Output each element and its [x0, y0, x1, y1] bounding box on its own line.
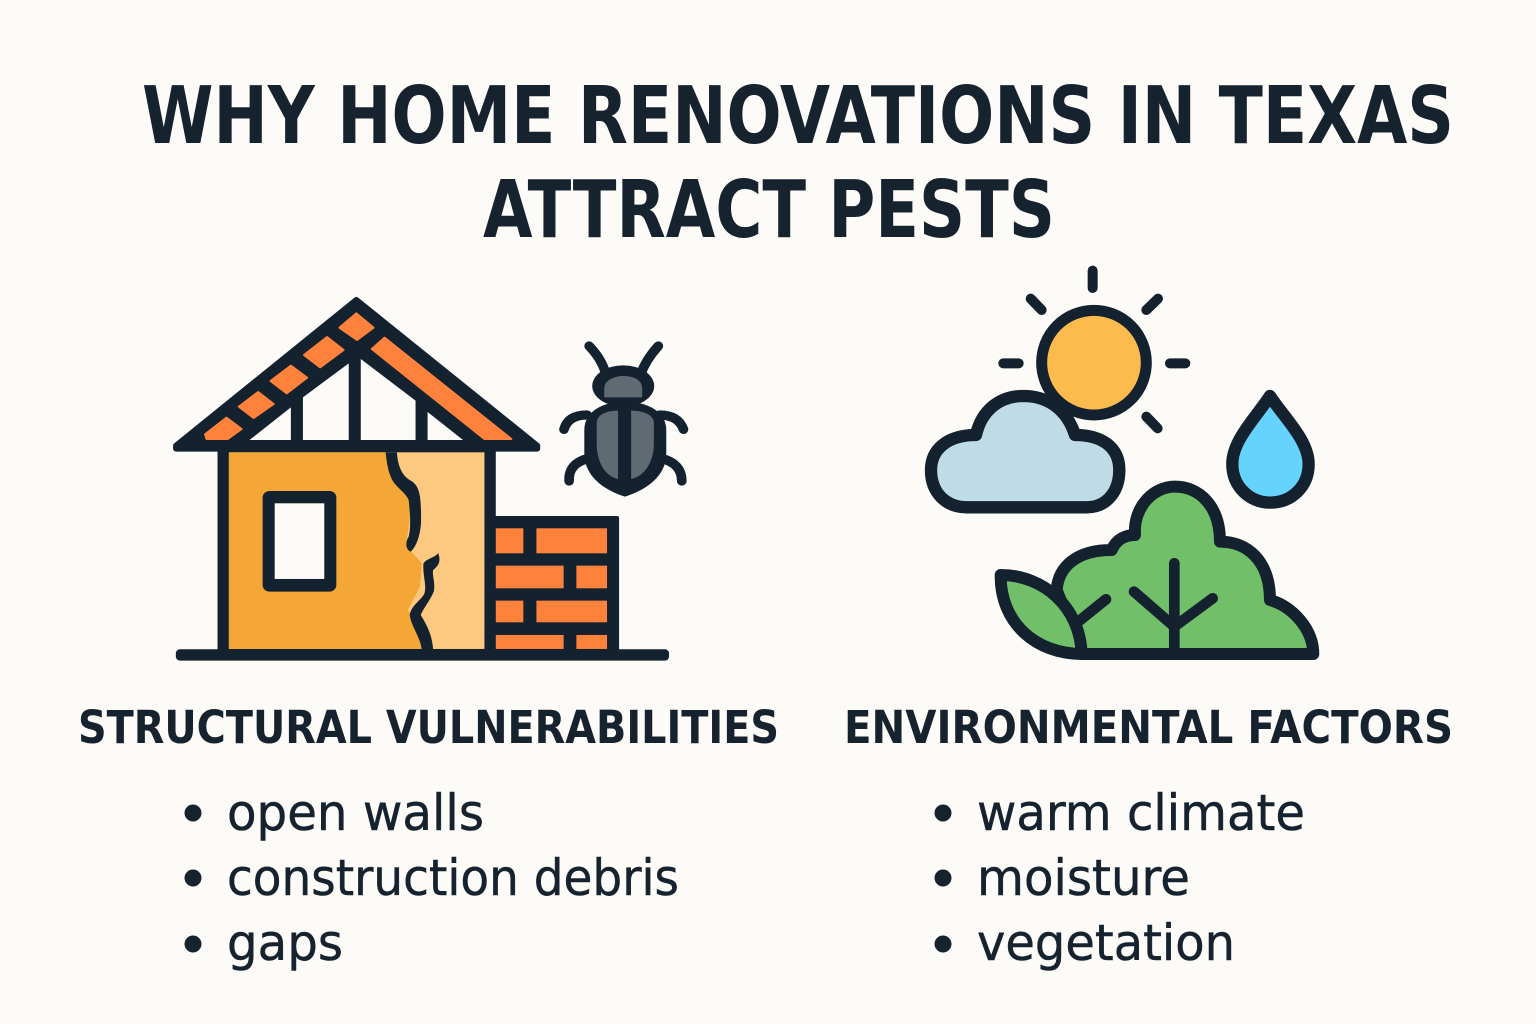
list: structural items: open walls	[227, 784, 484, 842]
list: environmental items	[934, 784, 1305, 972]
list: structural items	[184, 784, 679, 972]
icon: beetle	[564, 346, 683, 497]
title	[142, 70, 1454, 256]
icon: sun	[1003, 271, 1185, 428]
heading: environmental factors: ENVIRONMENTAL FACTORS	[844, 701, 1453, 754]
list: environmental items: vegetation	[977, 914, 1235, 972]
heading: structural vulnerabilities: STRUCTURAL VULNERABILITIES	[78, 701, 779, 754]
icon: house under renovation with brick wall	[176, 300, 669, 661]
title: ATTRACT PESTS	[483, 164, 1055, 256]
list: structural items: gaps	[227, 914, 343, 972]
icon: cloud	[931, 396, 1119, 507]
list: environmental items: warm climate	[977, 784, 1305, 842]
list: environmental items: moisture	[977, 849, 1190, 907]
icon: bush with leaf	[1001, 487, 1313, 654]
icon: water drop	[1232, 396, 1309, 503]
list: structural items: construction debris	[227, 849, 679, 907]
